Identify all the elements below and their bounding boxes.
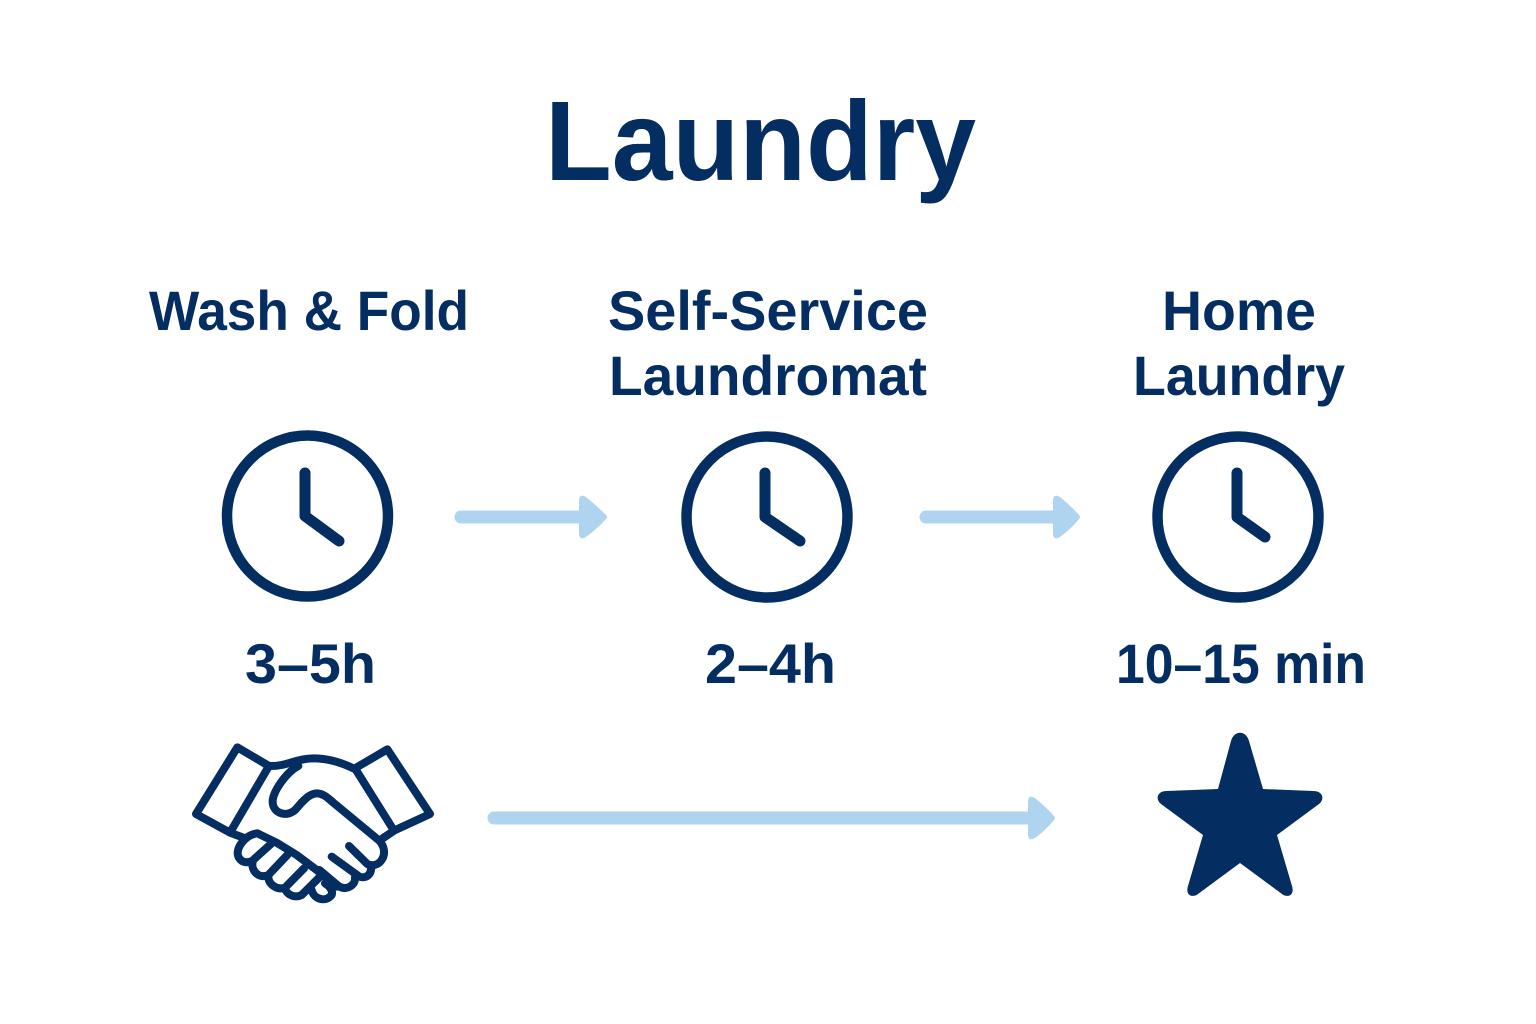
arrow: self-service to home laundry bbox=[926, 496, 1080, 538]
column 2 heading: Self-Service Laundromat: Laundromat bbox=[609, 344, 927, 407]
value: 10–15 min: 10–15 min bbox=[1116, 632, 1366, 695]
title: Laundry bbox=[545, 78, 976, 204]
column 3 heading: Home Laundry: Laundry bbox=[1133, 344, 1345, 407]
arrow: wash and fold to self-service bbox=[461, 496, 607, 538]
column 2 heading: Self-Service Laundromat bbox=[608, 279, 928, 407]
column 1 heading: Wash & Fold: Wash & Fold bbox=[149, 279, 469, 342]
column 2 heading: Self-Service Laundromat: Self-Service bbox=[608, 279, 928, 342]
arrow: handshake to star bbox=[494, 797, 1055, 839]
value: 3–5h: 3–5h bbox=[245, 632, 376, 695]
column 3 heading: Home Laundry bbox=[1133, 279, 1345, 407]
column 3 heading: Home Laundry: Home bbox=[1162, 279, 1316, 342]
value: 2–4h: 2–4h bbox=[705, 632, 836, 695]
icon: star bbox=[1158, 733, 1322, 896]
icon: clock 2 bbox=[686, 436, 848, 598]
icon: handshake bbox=[196, 747, 430, 899]
icon: clock 1 bbox=[227, 436, 388, 596]
icon: clock 3 bbox=[1158, 436, 1318, 598]
